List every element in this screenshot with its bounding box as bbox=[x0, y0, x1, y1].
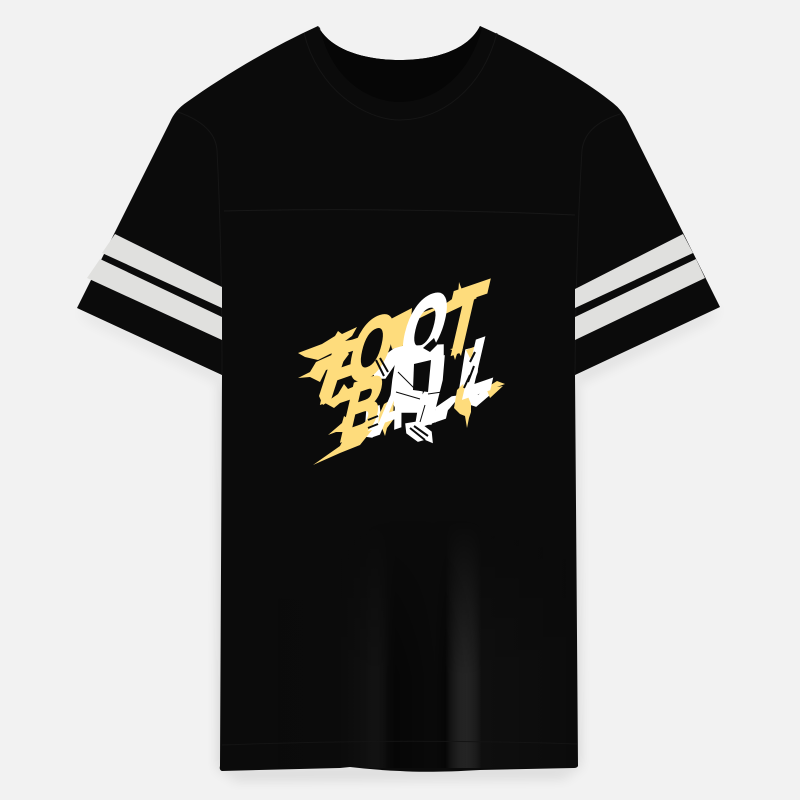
shirt body and sleeves bbox=[77, 26, 720, 772]
inner back collar bbox=[318, 26, 482, 102]
first letter O: O bbox=[340, 291, 404, 404]
right armhole seam bbox=[575, 114, 620, 375]
first letter L: L bbox=[410, 338, 465, 447]
left sleeve stripes bbox=[87, 234, 222, 340]
white player figure bbox=[365, 345, 490, 442]
football graphic bbox=[298, 262, 508, 465]
letter T: T bbox=[434, 262, 494, 379]
brush streaks bbox=[298, 280, 505, 465]
product image: black football t-shirt bbox=[77, 26, 720, 783]
t-shirt bbox=[77, 26, 720, 772]
letter B: B bbox=[334, 356, 392, 461]
letter F: F bbox=[314, 320, 365, 421]
right sleeve stripes bbox=[575, 234, 705, 340]
collar ribbing stitch bbox=[304, 33, 497, 120]
second letter O: O bbox=[393, 270, 457, 383]
last letter L: L bbox=[456, 315, 508, 418]
hem folds bbox=[450, 574, 480, 768]
left armhole seam bbox=[178, 112, 222, 375]
FOOT wordmark bbox=[314, 262, 494, 421]
BALL wordmark bbox=[334, 315, 508, 461]
shirt shadow bbox=[77, 307, 720, 778]
yoke seam bbox=[224, 210, 575, 215]
letter A: A bbox=[370, 368, 415, 450]
hem stitch bbox=[222, 741, 577, 745]
player line hatching bbox=[368, 338, 475, 440]
